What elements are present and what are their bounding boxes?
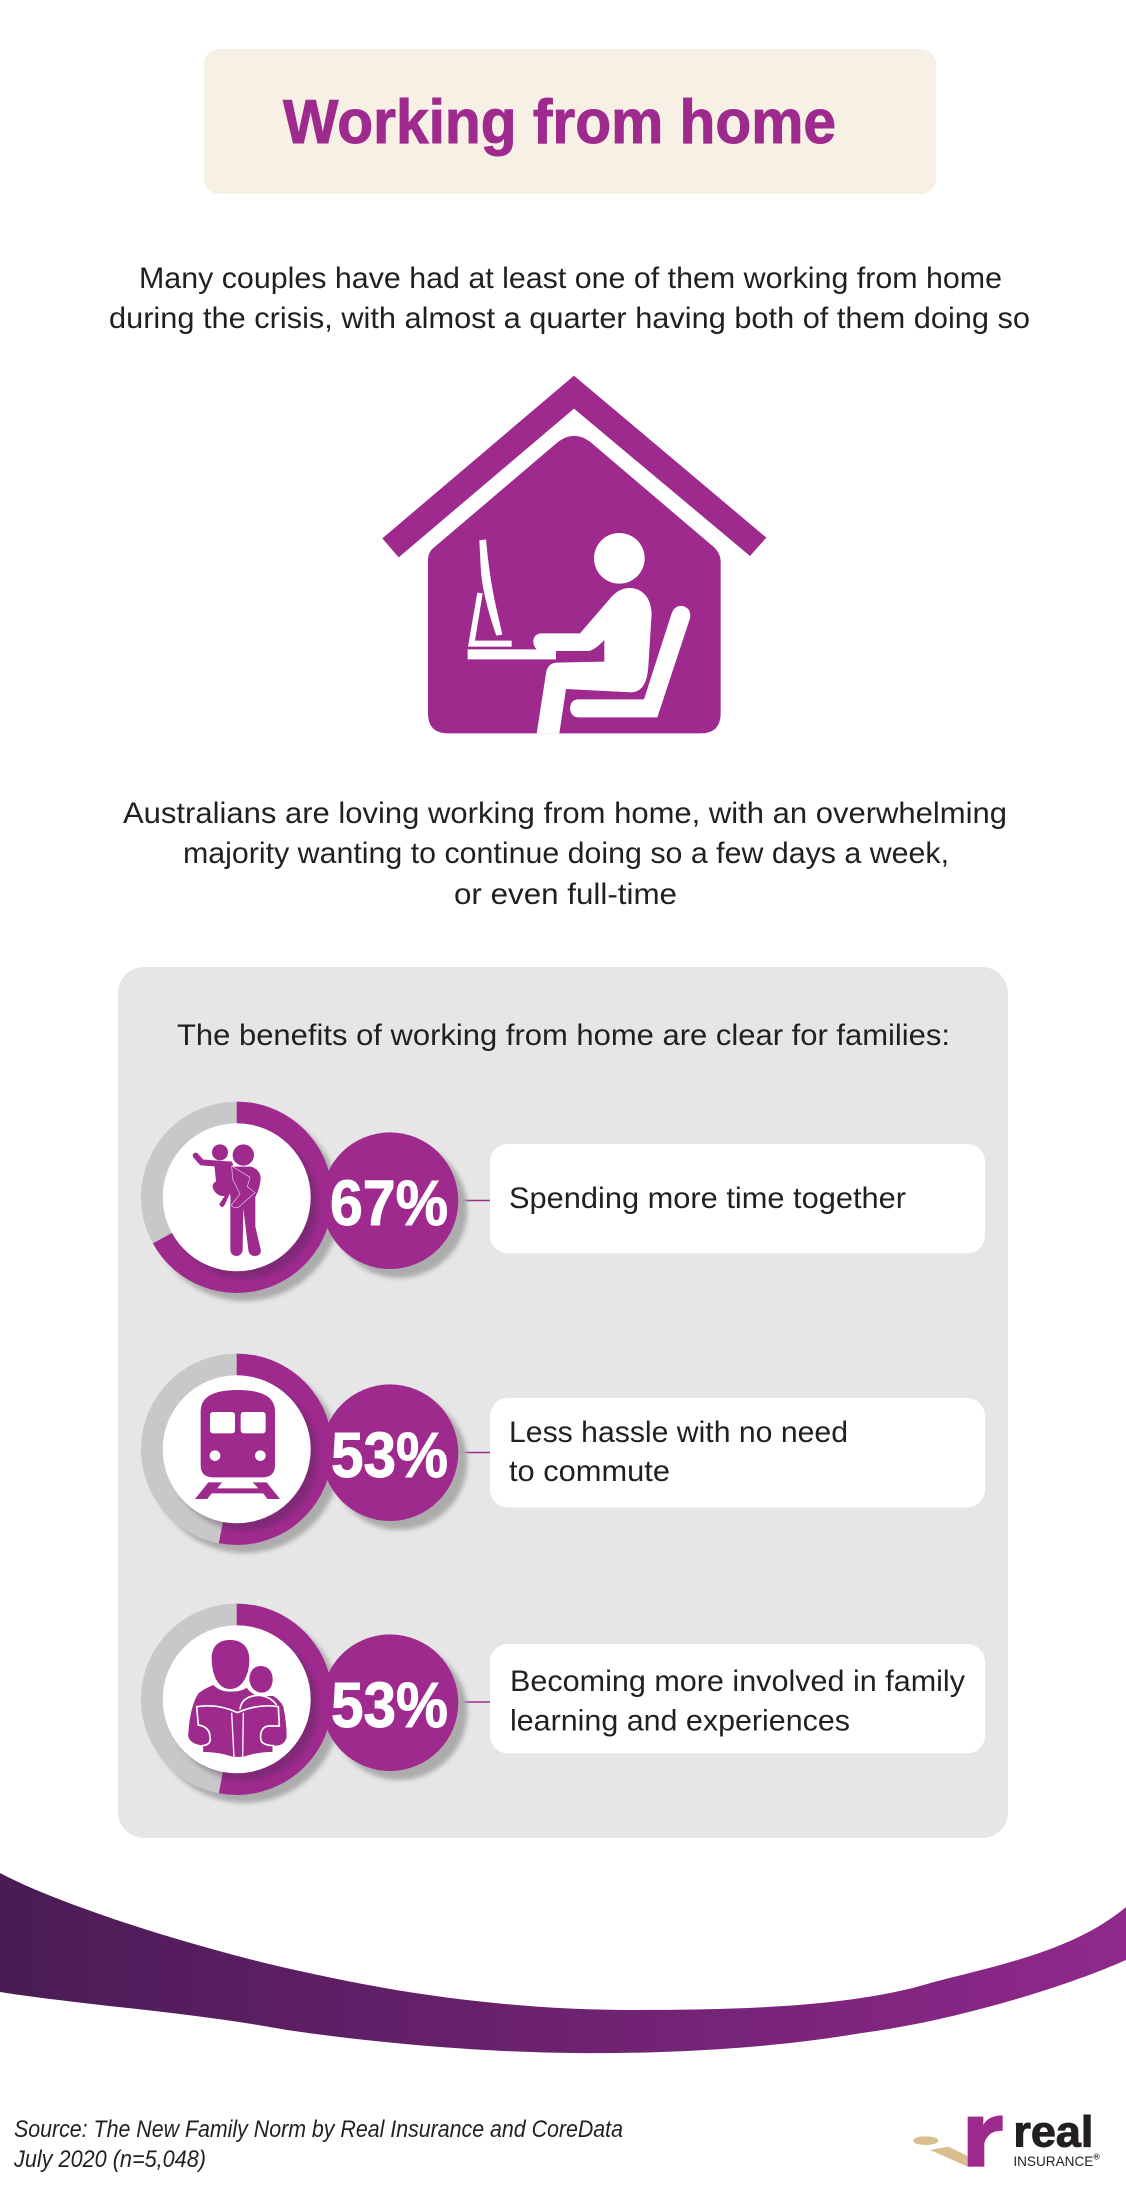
- logo wordmark: INSURANCE: [1013, 2153, 1093, 2169]
- source note: July 2020 (n=5,048): [13, 2146, 206, 2173]
- label card: [490, 1144, 985, 1254]
- donut chart 53%: [141, 1354, 340, 1553]
- label card: learning and experiences: [510, 1704, 850, 1738]
- icon: parent and child reading: [188, 1640, 287, 1758]
- logo wordmark: real: [1013, 2109, 1093, 2157]
- percent circle 67%: 67%: [330, 1167, 448, 1239]
- wave band: [0, 1873, 1126, 2053]
- icon: house body: [428, 436, 721, 733]
- intro text: during the crisis, with almost a quarter having both of them doing so: [109, 302, 1030, 335]
- title: Working from home: [283, 88, 836, 157]
- body text: majority wanting to continue doing so a few days a week,: [183, 837, 949, 870]
- percent circle 67%: [322, 1132, 467, 1278]
- connector line: [450, 1701, 492, 1703]
- body text: or even full-time: [454, 878, 677, 911]
- title banner: [204, 49, 936, 194]
- icon: person body: [468, 588, 652, 733]
- panel heading: The benefits of working from home are clear for families:: [177, 1019, 950, 1052]
- body text: Australians are loving working from home, with an overwhelming: [123, 797, 1007, 830]
- icon: monitor: [468, 539, 512, 647]
- icon: house with person working at a computer: [382, 376, 766, 733]
- icon: train: [195, 1390, 280, 1499]
- source note: [13, 2116, 623, 2173]
- connector line: [450, 1200, 492, 1202]
- label card: Spending more time together: [509, 1182, 906, 1215]
- row: 67% spending more time together: [141, 1102, 985, 1301]
- row: 53% family learning: [141, 1604, 985, 1803]
- percent circle 53%: [322, 1634, 467, 1780]
- body text: [123, 797, 1007, 911]
- label card: [490, 1398, 985, 1508]
- percent circle 53%: [322, 1384, 467, 1530]
- donut chart 53%: [141, 1604, 340, 1803]
- icon: person head: [594, 533, 645, 584]
- connector line: [450, 1452, 492, 1454]
- logo mark: [913, 2115, 1003, 2167]
- icon: adult carrying child: [196, 1144, 261, 1256]
- source note: Source: The New Family Norm by Real Insurance and CoreData: [14, 2116, 623, 2143]
- donut chart 67%: [141, 1102, 340, 1301]
- icon: chair: [570, 606, 690, 717]
- percent circle 53%: 53%: [331, 1419, 448, 1491]
- intro text: [109, 262, 1030, 335]
- percent circle 53%: 53%: [331, 1669, 448, 1741]
- panel: benefits: [118, 967, 1008, 1838]
- label card: [490, 1644, 985, 1754]
- logo: Real Insurance: [913, 2109, 1100, 2169]
- label card: Less hassle with no need: [509, 1416, 848, 1449]
- logo wordmark: ®: [1093, 2151, 1100, 2161]
- intro text: Many couples have had at least one of them working from home: [139, 262, 1002, 295]
- label card: to commute: [509, 1455, 670, 1488]
- label card: Becoming more involved in family: [510, 1665, 965, 1698]
- icon: roof: [382, 376, 766, 557]
- row: 53% less hassle: [141, 1354, 985, 1553]
